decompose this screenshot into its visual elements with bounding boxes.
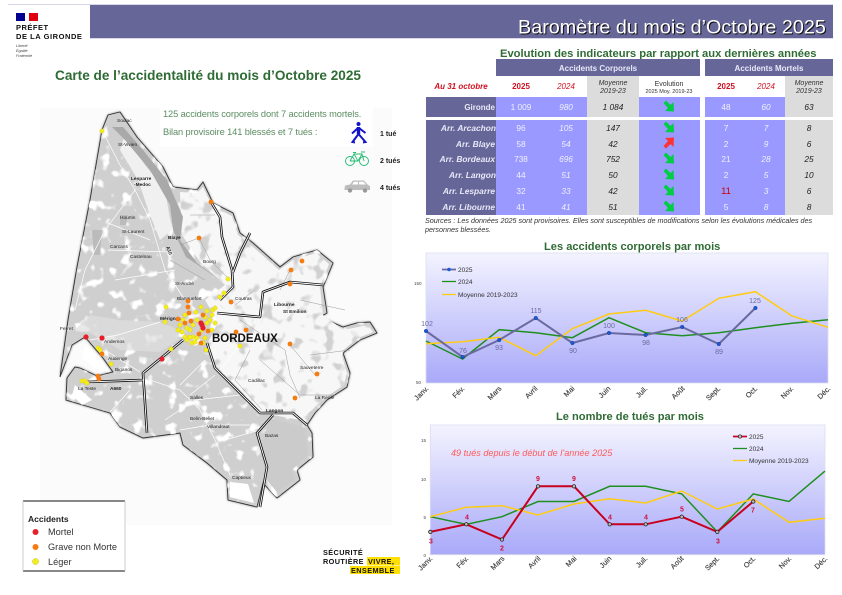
town labels: -Medoc — [134, 182, 151, 188]
data labels: 102 — [421, 321, 433, 328]
map legend: Mortel — [48, 527, 74, 537]
data labels: 7 — [751, 508, 755, 514]
town labels: Andernos — [104, 339, 125, 345]
x axis labels: Juin — [598, 554, 613, 570]
town labels: BORDEAUX — [212, 333, 278, 345]
town labels: Bourg — [203, 259, 216, 265]
row: Lesparre: 33 — [561, 186, 571, 196]
y axis labels: 0 — [423, 553, 426, 558]
y axis labels — [421, 438, 426, 558]
map legend: Grave non Morte — [48, 542, 117, 552]
row: Gironde: 980 — [559, 102, 573, 112]
data labels: 76 — [459, 348, 467, 355]
town labels: Blanquefort — [177, 296, 202, 302]
map of Gironde — [58, 110, 379, 509]
row: Lesparre: 32 — [516, 186, 526, 196]
row: Blaye: 54 — [561, 139, 571, 149]
y axis labels: 10 — [421, 477, 426, 482]
row: Libourne — [441, 200, 812, 212]
data labels: 3 — [429, 538, 433, 546]
data labels: 4 — [644, 514, 648, 522]
town labels: Ferret — [60, 326, 73, 332]
map legend: Accidents — [28, 514, 69, 524]
data labels: 98 — [642, 340, 650, 347]
row: Gironde — [464, 100, 814, 112]
indicators heading: Evolution des indicateurs par rapport aux dernières années — [500, 48, 816, 60]
row: Langon: 44 — [516, 170, 526, 180]
logo: Préfet de la Gironde: Liberté — [16, 44, 28, 48]
row: Arcachon: 8 — [807, 123, 812, 133]
row: Langon: 51 — [561, 170, 571, 180]
town labels: A660 — [110, 386, 122, 392]
x axis labels: Juil. — [634, 384, 649, 400]
row: Lesparre: 11 — [721, 186, 731, 197]
y axis labels: 150 — [414, 281, 422, 286]
logo: Sécurité routière: SÉCURITÉ — [323, 548, 363, 557]
table headers: 2025 — [512, 82, 530, 91]
town labels: St-Vivien — [118, 142, 137, 148]
town labels: Belin-Beliet — [190, 416, 215, 422]
town labels — [60, 118, 335, 481]
row: Libourne: 41 — [516, 202, 526, 212]
table headers: 2024 — [756, 82, 775, 91]
chart legend — [442, 267, 518, 299]
row: Gironde: 63 — [804, 102, 814, 112]
x axis labels: Nov. — [777, 554, 793, 571]
town labels: Lesparre — [131, 176, 152, 182]
town labels: Villandraut — [207, 424, 230, 430]
table headers: 2019-23 — [795, 88, 822, 95]
row: Bordeaux: 21 — [721, 154, 731, 164]
x axis labels: Mai — [562, 384, 577, 399]
logo: Préfet de la Gironde: Fraternité — [16, 54, 32, 58]
label: 1 tué: 1 tué — [380, 131, 396, 138]
data labels: 3 — [716, 538, 720, 546]
row: Langon: 50 — [608, 170, 618, 180]
data labels — [429, 476, 755, 552]
table backgrounds — [426, 59, 833, 215]
row: Blaye: Arr. Blaye — [455, 139, 495, 149]
logo: Sécurité routière: VIVRE, — [368, 557, 394, 566]
row: Gironde: Gironde — [464, 103, 496, 112]
row: Arcachon: 147 — [606, 123, 620, 133]
table source note: Sources : Les données 2025 sont provisoires. Elles sont susceptibles de modifications selon les évolutions médicales des — [425, 216, 813, 225]
row: Arcachon: 96 — [516, 123, 526, 133]
row: Blaye: 42 — [608, 139, 618, 149]
icon: pedestrian — [352, 122, 366, 142]
row: Bordeaux: 696 — [559, 154, 573, 164]
row: Libourne: 8 — [764, 202, 769, 212]
town labels: Castelnau — [130, 254, 152, 260]
row: Bordeaux: 738 — [514, 154, 528, 164]
table source note — [424, 216, 813, 234]
x axis labels: Fév. — [450, 384, 466, 400]
x axis labels: Avril — [523, 384, 540, 400]
x axis labels: Nov. — [779, 384, 795, 401]
chart legend: Moyenne 2019-2023 — [749, 458, 809, 465]
row: Libourne: Arr. Libourne — [441, 202, 495, 212]
town labels: Langon — [266, 408, 283, 414]
town labels: Hourtin — [120, 215, 136, 221]
row: Lesparre: Arr. Lesparre — [442, 186, 495, 196]
row: Bordeaux: 28 — [760, 154, 771, 164]
town labels: Bazas — [265, 433, 279, 439]
data labels: 106 — [676, 317, 688, 324]
data labels: 125 — [749, 298, 761, 305]
row: Arcachon: 7 — [764, 123, 769, 133]
row: Gironde: 1 009 — [511, 102, 532, 112]
data labels: 5 — [680, 506, 684, 514]
chart legend: 2025 — [458, 267, 473, 274]
label: 4 tués: 4 tués — [380, 185, 400, 192]
row: Libourne: 5 — [724, 202, 729, 212]
y axis labels: 5 — [423, 515, 426, 520]
chart legend: 2024 — [458, 279, 473, 286]
table headers — [433, 64, 824, 95]
row: Langon — [448, 168, 814, 180]
table headers: 2025 — [717, 82, 735, 91]
chart legend: 2025 — [749, 434, 764, 441]
x axis labels: Août — [668, 554, 685, 571]
town labels: Sauveterre — [300, 365, 324, 371]
town labels: Captieux — [232, 475, 252, 481]
row: Libourne: 41 — [561, 202, 571, 212]
data labels: 4 — [465, 514, 469, 522]
x axis labels: Janv. — [416, 554, 434, 572]
markers — [424, 306, 757, 359]
row: Langon: 10 — [804, 170, 814, 180]
data labels: 90 — [569, 348, 577, 355]
x axis labels: Sept. — [704, 384, 722, 402]
map heading: Carte de l’accidentalité du mois d’Octobre 2025 — [55, 68, 361, 83]
logo: Sécurité routière: ENSEMBLE — [351, 566, 395, 575]
row: Lesparre — [442, 184, 812, 197]
row: Lesparre: 42 — [608, 186, 618, 196]
chart heading: tués: Le nombre de tués par mois — [556, 411, 704, 423]
row: Langon: 5 — [764, 170, 769, 180]
x axis labels: Juin — [597, 384, 612, 400]
table headers: Moyenne — [599, 80, 628, 87]
summary text block: 125 accidents corporels dont 7 accidents mortels. — [163, 109, 361, 119]
indicators table — [426, 59, 833, 215]
town labels: Audenge — [108, 356, 128, 362]
town labels: Cadillac — [248, 378, 266, 384]
data labels: 9 — [572, 476, 576, 483]
town labels: La Réole — [315, 395, 335, 401]
town labels: La Teste — [78, 386, 96, 392]
town labels: Soulac — [117, 118, 132, 124]
header banner — [8, 4, 833, 39]
table headers: Accidents Corporels — [559, 64, 638, 73]
x axis labels: Fév. — [454, 554, 470, 570]
white clearings texture — [61, 126, 365, 502]
row: Bordeaux: 25 — [803, 154, 814, 164]
x axis labels — [412, 384, 832, 402]
data labels: 4 — [608, 514, 612, 522]
data labels — [421, 298, 761, 356]
chart legend: Moyenne 2019-2023 — [458, 292, 518, 299]
town labels: A10 — [164, 246, 173, 256]
row: Lesparre: 3 — [764, 186, 769, 196]
data labels: 9 — [536, 476, 540, 483]
row: Bordeaux: Arr. Bordeaux — [439, 154, 495, 164]
town labels: Coutras — [235, 296, 252, 302]
town labels: Salles — [190, 395, 204, 401]
x axis labels: Oct. — [742, 554, 757, 570]
row: Blaye: 2 — [724, 139, 729, 149]
logo: Préfet de la Gironde: DE LA GIRONDE — [16, 32, 82, 41]
town labels: Carcans — [110, 244, 128, 250]
row: Gironde: 60 — [761, 102, 771, 112]
y axis labels — [414, 281, 422, 385]
markers — [429, 485, 755, 541]
x axis labels: Mai — [564, 554, 579, 569]
table headers: Evolution — [655, 81, 684, 88]
x axis labels: Avril — [526, 554, 543, 570]
town labels: St-Laurent — [122, 229, 145, 235]
label: 2 tués: 2 tués — [380, 158, 400, 165]
table headers: 2019-23 — [599, 88, 626, 95]
data labels: 2 — [500, 546, 504, 552]
x axis labels: Sept. — [703, 554, 721, 572]
row: Langon: Arr. Langon — [448, 170, 496, 180]
row: Blaye: 6 — [807, 139, 812, 149]
town labels: St Emilion — [283, 309, 307, 315]
accident dots: léger — [80, 129, 242, 385]
x axis labels: Mars — [486, 384, 504, 402]
row: Lesparre: 6 — [807, 186, 812, 196]
table headers: 2024 — [556, 82, 575, 91]
annotation: 49 tués depuis le début de l’année 2025 — [451, 448, 613, 458]
icon: car — [344, 176, 372, 195]
town labels: Blaye — [168, 235, 181, 241]
row: Bordeaux: 752 — [606, 154, 620, 164]
icon: bicycle — [346, 152, 368, 166]
table headers: Au 31 octobre — [433, 82, 488, 91]
main title: Baromètre du mois d’Octobre 2025 — [518, 16, 826, 38]
x axis labels: Déc. — [812, 554, 829, 571]
chart legend: 2024 — [749, 446, 764, 453]
logo: Sécurité routière — [323, 548, 400, 575]
y axis labels: 15 — [421, 438, 426, 443]
town labels: Biganos — [115, 367, 133, 373]
x axis labels: Juil. — [634, 554, 649, 570]
town labels: Mérignac — [160, 316, 181, 322]
logo: Préfet de la Gironde: Égalité — [16, 48, 28, 53]
row: Arcachon: 105 — [559, 123, 573, 133]
row: Arcachon — [440, 122, 812, 133]
row: Arcachon: 7 — [724, 123, 729, 133]
table headers: 2025 Moy. 2019-23 — [646, 89, 692, 95]
row: Libourne: 51 — [608, 202, 618, 212]
summary text block: Bilan provisoire 141 blessés et 7 tués : — [163, 127, 317, 137]
x axis labels: Janv. — [412, 384, 430, 402]
logo: Préfet de la Gironde — [16, 13, 82, 58]
x axis labels: Oct. — [744, 384, 759, 400]
vineyard grey patches — [180, 194, 370, 416]
data labels: 100 — [603, 323, 615, 330]
town labels: Libourne — [274, 302, 295, 308]
table headers: Accidents Mortels — [735, 64, 804, 73]
accident dots: grave — [96, 200, 319, 400]
row: Blaye: 9 — [764, 139, 769, 149]
chart legend — [733, 434, 809, 465]
map legend — [23, 501, 125, 571]
row: Libourne: 8 — [807, 202, 812, 212]
row: Langon: 2 — [724, 170, 729, 180]
row: Arcachon: Arr. Arcachon — [440, 123, 496, 133]
x axis labels: Mars — [489, 554, 507, 572]
accident dots: mortel — [83, 320, 206, 362]
row: Blaye: 58 — [516, 139, 526, 149]
x axis labels: Déc. — [815, 384, 832, 401]
row: Gironde: 48 — [721, 102, 731, 112]
logo: Préfet de la Gironde: PRÉFET — [16, 23, 49, 32]
table headers: Moyenne — [795, 80, 824, 87]
map legend: Léger — [48, 557, 72, 567]
data labels: 115 — [530, 308, 542, 315]
data labels: 89 — [715, 349, 723, 356]
secondary roads — [75, 130, 260, 475]
y axis labels: 50 — [416, 380, 422, 385]
row: Gironde: 1 084 — [603, 102, 624, 112]
row: Blaye — [455, 138, 812, 149]
line chart: tués par mois — [416, 425, 829, 572]
line chart: accidents corporels — [412, 253, 832, 402]
table source note: personnes blessées. — [424, 225, 491, 234]
logo: Sécurité routière: ROUTIÈRE — [323, 557, 364, 566]
x axis labels: Août — [669, 384, 686, 401]
x axis labels — [416, 554, 829, 572]
light vineyard land — [180, 187, 373, 420]
town labels: St-André — [175, 281, 194, 287]
row: Bordeaux — [439, 152, 814, 164]
data labels: 93 — [495, 345, 503, 352]
summary text block — [160, 108, 373, 147]
motorways — [87, 202, 323, 507]
chart heading: accidents corporels: Les accidents corporels par mois — [544, 241, 720, 253]
